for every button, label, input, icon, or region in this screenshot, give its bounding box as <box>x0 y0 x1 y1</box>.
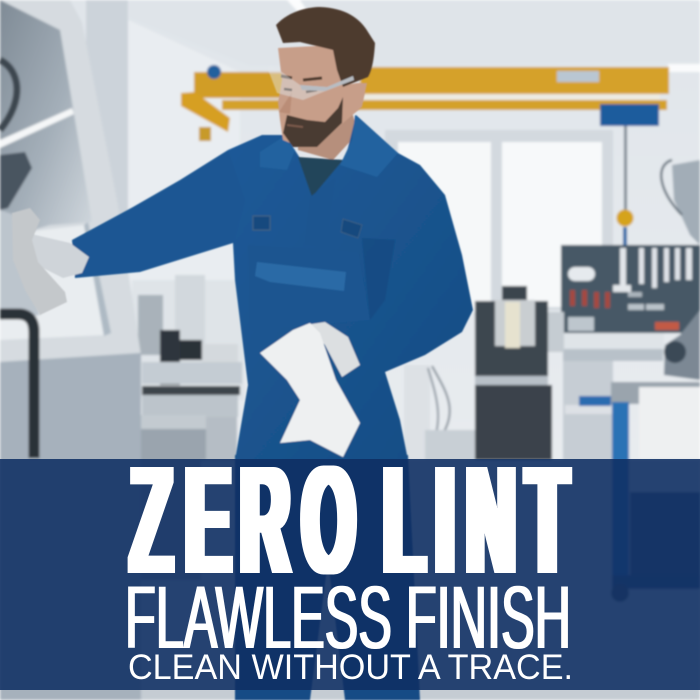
shelves <box>560 333 664 461</box>
arm crease shadow <box>362 238 395 320</box>
mouth <box>287 125 303 127</box>
machine: dark interior cables <box>0 60 32 210</box>
machine: white door <box>0 225 105 340</box>
machine: frame <box>0 0 141 700</box>
side wall <box>128 20 240 330</box>
safety glasses <box>267 65 354 100</box>
ceiling light right <box>668 64 700 72</box>
lower floor <box>130 460 700 700</box>
far window <box>385 130 613 312</box>
bottom banner <box>0 434 700 690</box>
yellow overhead crane <box>181 65 669 141</box>
hoist and hook <box>600 104 659 247</box>
face <box>278 45 367 147</box>
dark undershirt <box>298 157 343 197</box>
ceiling light <box>287 0 308 12</box>
neck <box>298 105 358 160</box>
eyebrows <box>281 76 322 80</box>
floor <box>425 430 475 462</box>
heading: zero lint: ZERO LINT <box>131 434 568 607</box>
man in blue coveralls <box>12 7 473 700</box>
machine: black handle <box>0 314 34 458</box>
machine: window glass <box>0 0 92 240</box>
eyes <box>284 89 317 92</box>
white wipe in hand <box>260 323 360 457</box>
left glove <box>27 233 89 278</box>
torso and right arm <box>228 115 473 460</box>
robot arm <box>661 160 700 380</box>
machine: window lower edge <box>84 222 111 336</box>
dark control cabinet <box>475 286 564 460</box>
collar <box>260 115 398 177</box>
blue workbench and cart <box>611 382 700 602</box>
bib pocket <box>248 245 370 330</box>
navy translucent band <box>0 459 700 690</box>
pocket flap <box>255 262 346 291</box>
legs <box>235 455 420 700</box>
wall column <box>86 0 128 340</box>
nose shadow <box>279 92 292 114</box>
left sleeve <box>72 150 245 278</box>
placket shadow <box>305 178 335 245</box>
hair <box>276 7 375 87</box>
beard <box>283 97 343 147</box>
bib strap buckles <box>253 216 362 238</box>
right glove <box>305 322 360 377</box>
background lab equipment <box>132 275 244 580</box>
cloth on machine <box>12 208 67 315</box>
machine: reflection strip <box>0 108 74 148</box>
machine: lower gray panel <box>0 353 141 700</box>
ceiling <box>130 0 700 66</box>
machine: side panel <box>0 210 40 320</box>
tool board <box>561 245 700 333</box>
tagline: CLEAN WITHOUT A TRACE. <box>128 648 573 687</box>
cables and wall cabinet <box>404 365 450 460</box>
